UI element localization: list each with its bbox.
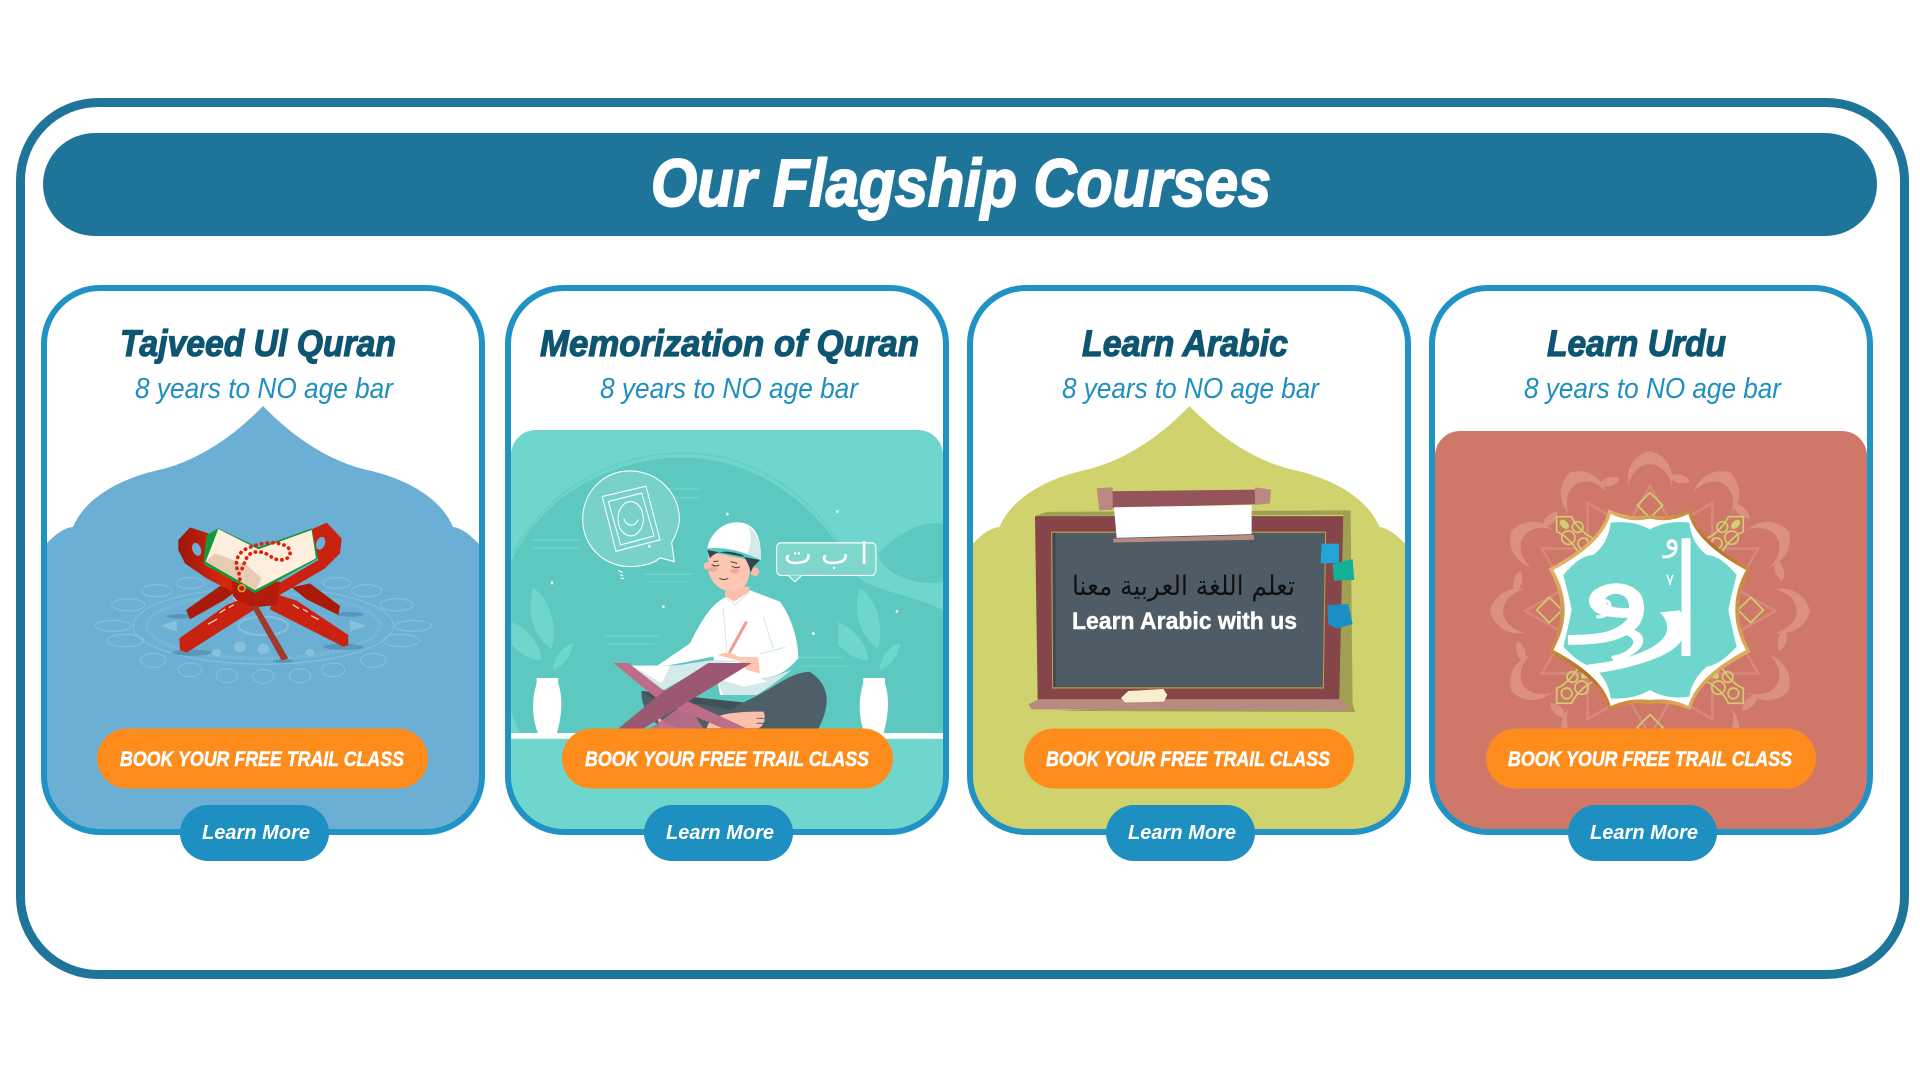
course heading: Memorization of Quran bbox=[540, 323, 919, 364]
booking button: BOOK YOUR FREE TRAIL CLASS bbox=[1046, 748, 1330, 771]
title: Our Flagship Courses bbox=[651, 146, 1271, 221]
booking button bbox=[1024, 728, 1354, 788]
panel: Memorization of Quran course bbox=[508, 288, 946, 861]
card border bbox=[508, 288, 946, 832]
age note: 8 years to NO age bar bbox=[1524, 373, 1782, 405]
learn more button: Learn More bbox=[1590, 822, 1698, 844]
card border bbox=[970, 288, 1408, 832]
age note: 8 years to NO age bar bbox=[600, 373, 859, 405]
Urdu calligraphy: د bbox=[1584, 587, 1659, 679]
course heading: Learn Arabic bbox=[1082, 323, 1288, 364]
learn more button bbox=[1568, 805, 1717, 861]
card border bbox=[1432, 288, 1870, 832]
Urdu calligraphy: و bbox=[1596, 579, 1614, 619]
alphabet speech bubble letters: ت bbox=[784, 537, 812, 572]
learn more button: Learn More bbox=[202, 822, 310, 844]
learn more button bbox=[180, 805, 329, 861]
course heading: Tajveed Ul Quran bbox=[120, 323, 396, 364]
medallion bbox=[1537, 493, 1763, 740]
booking button bbox=[562, 728, 893, 788]
Urdu calligraphy: ٧ bbox=[1666, 570, 1675, 589]
card border bbox=[44, 288, 482, 832]
age note: 8 years to NO age bar bbox=[135, 373, 394, 405]
chalkboard English text: Learn Arabic with us bbox=[1072, 608, 1297, 635]
background: terracotta panel bbox=[1435, 431, 1867, 830]
booking button: BOOK YOUR FREE TRAIL CLASS bbox=[585, 748, 869, 771]
illustration: chalkboard bbox=[1028, 487, 1355, 712]
panel: Learn Arabic course bbox=[970, 288, 1408, 861]
Urdu calligraphy bbox=[1568, 512, 1704, 693]
booking button: BOOK YOUR FREE TRAIL CLASS bbox=[120, 748, 404, 771]
panel: Tajweed Ul Quran course bbox=[44, 288, 482, 861]
learn more button bbox=[1106, 805, 1255, 861]
learn more button: Learn More bbox=[1128, 822, 1236, 844]
illustration: boy reading Quran bbox=[511, 453, 943, 739]
background: green dome bbox=[972, 406, 1406, 830]
background: teal panel bbox=[511, 430, 943, 830]
Urdu calligraphy: ر bbox=[1575, 540, 1704, 674]
panel: Learn Urdu course bbox=[1432, 288, 1870, 861]
alphabet speech bubble letters: ا bbox=[860, 537, 868, 572]
learn more button bbox=[644, 805, 793, 861]
outer frame bbox=[20, 102, 1904, 974]
Urdu calligraphy: و bbox=[1662, 519, 1680, 559]
illustration: Quran on wooden stand bbox=[95, 523, 432, 683]
alphabet speech bubble letters bbox=[784, 537, 868, 572]
booking button bbox=[97, 728, 428, 788]
course heading: Learn Urdu bbox=[1547, 323, 1726, 364]
alphabet speech bubble letters: ب bbox=[821, 537, 849, 572]
chalkboard Arabic text: تعلم اللغة العربية معنا bbox=[1072, 571, 1295, 602]
booking button bbox=[1486, 728, 1816, 788]
Urdu calligraphy: ا bbox=[1672, 512, 1700, 693]
Urdu calligraphy: و bbox=[1568, 516, 1657, 645]
age note: 8 years to NO age bar bbox=[1062, 373, 1320, 405]
booking button: BOOK YOUR FREE TRAIL CLASS bbox=[1508, 748, 1792, 771]
title banner bbox=[43, 133, 1877, 236]
mandala ornament bbox=[1490, 451, 1810, 728]
background: blue dome bbox=[46, 406, 479, 830]
learn more button: Learn More bbox=[666, 822, 774, 844]
